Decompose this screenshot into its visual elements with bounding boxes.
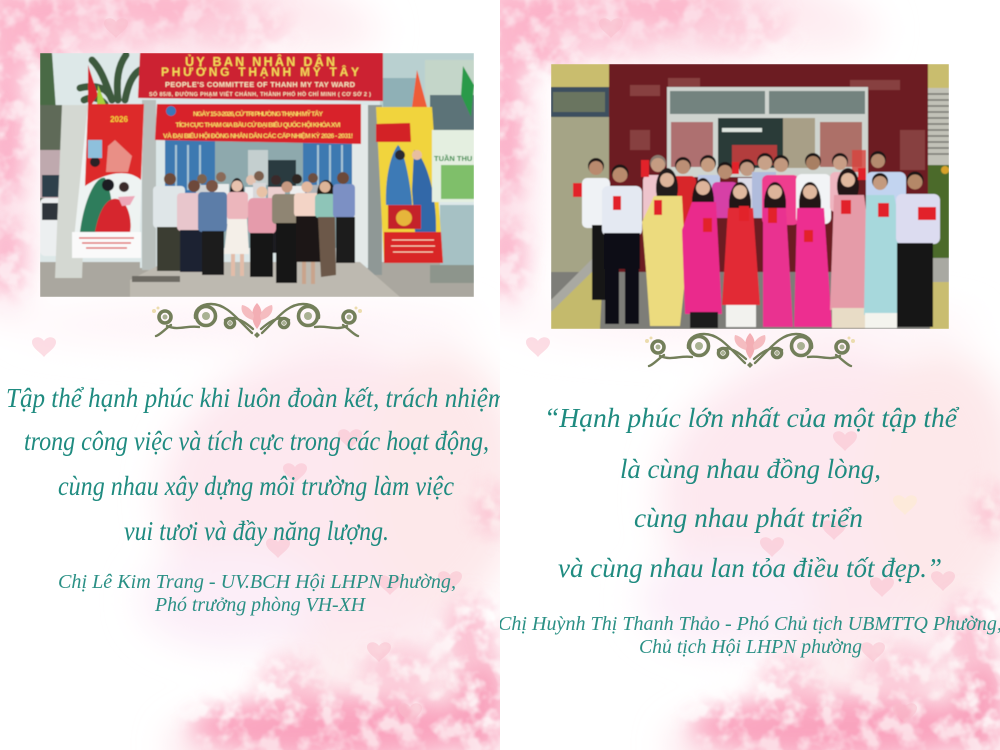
people: back row	[196, 171, 320, 253]
quote: left: cùng nhau xây dựng môi trường làm việc	[58, 471, 454, 501]
quote: right: và cùng nhau lan tỏa điều tốt đẹp.”	[558, 553, 942, 583]
sign: ward committee: ỦY BAN NHÂN DÂN	[185, 54, 335, 69]
flags	[88, 65, 98, 110]
building wall	[140, 98, 380, 268]
ornament: right flourish	[645, 333, 855, 368]
right pale hearts	[526, 18, 955, 723]
banner: election call: TÍCH CỰC THAM GIA BẦU CỬ ĐẠI BIỂU QUỐC HỘI KHÓA XVI	[176, 119, 341, 129]
poster: election with ballot box	[376, 107, 443, 263]
right pillar	[351, 143, 356, 218]
poster: family with church	[72, 104, 144, 258]
left background wash	[0, 0, 520, 750]
quote: right: “Hạnh phúc lớn nhất của một tập thể	[544, 403, 960, 433]
banner: election call: VÀ ĐẠI BIỂU HỘI ĐỒNG NHÂN DÂN CÁC CẤP NHIỆM KỲ 2026 - 2031!	[163, 130, 353, 140]
sign: ward committee: PEOPLE'S COMMITTEE OF THANH MY TAY WARD	[165, 80, 356, 89]
left pale hearts	[32, 18, 462, 723]
sign: ward committee: PHƯỜNG THẠNH MỸ TÂY	[161, 64, 359, 79]
people: back row	[582, 150, 906, 300]
ornament: left flourish	[152, 303, 362, 338]
photo: group with red envelopes	[551, 64, 949, 329]
attribution: right: Chủ tịch Hội LHPN phường	[639, 636, 862, 658]
panel: left watercolor card	[0, 0, 520, 750]
attribution: left: Chị Lê Kim Trang - UV.BCH Hội LHPN Phường,	[58, 571, 456, 593]
banner: green collection notice	[431, 129, 474, 203]
attribution: left: Phó trưởng phòng VH-XH	[154, 594, 367, 616]
quote: right	[544, 403, 960, 583]
banner: green collection notice: TUẦN THU GOM	[434, 153, 492, 163]
people: front row	[602, 164, 940, 328]
panel: right watercolor card	[500, 0, 1000, 750]
quote: left	[6, 383, 506, 546]
red envelopes	[573, 160, 936, 242]
photo: group at ward committee office	[40, 53, 492, 297]
sky and street background	[40, 53, 474, 262]
quote: left: vui tươi và đầy năng lượng.	[124, 516, 389, 546]
quote: left: trong công việc và tích cực trong các hoạt động,	[24, 426, 489, 456]
people: front row	[153, 172, 355, 284]
doors and windows	[667, 87, 868, 177]
sign: ward committee	[138, 53, 383, 101]
quote: right: cùng nhau phát triển	[634, 503, 863, 533]
quote: left: Tập thể hạnh phúc khi luôn đoàn kết, trách nhiệm	[6, 383, 506, 413]
left pillar	[55, 105, 88, 278]
tile reflections	[630, 78, 925, 170]
banner: election call: NGÀY 15-3-2026, CỬ TRI PHƯỜNG THẠNH MỸ TÂY	[193, 109, 323, 118]
banner: election call	[155, 104, 361, 144]
steps and shadow	[130, 262, 400, 297]
attribution: right: Chị Huỳnh Thị Thanh Thảo - Phó Chủ tịch UBMTTQ Phường,	[498, 613, 1000, 635]
quote: right: là cùng nhau đồng lòng,	[620, 454, 881, 484]
attribution: left	[58, 571, 456, 616]
attribution: right	[498, 613, 1000, 658]
building backdrop	[608, 64, 929, 273]
poster: family with church: 2026	[110, 115, 128, 124]
sign: ward committee: SỐ 85/8, ĐƯỜNG PHẠM VIẾT CHÁNH, THÀNH PHỐ HỒ CHÍ MINH ( CƠ SỞ 2 )	[149, 90, 371, 98]
benches and floor	[551, 272, 949, 329]
right background wash	[500, 0, 1000, 750]
